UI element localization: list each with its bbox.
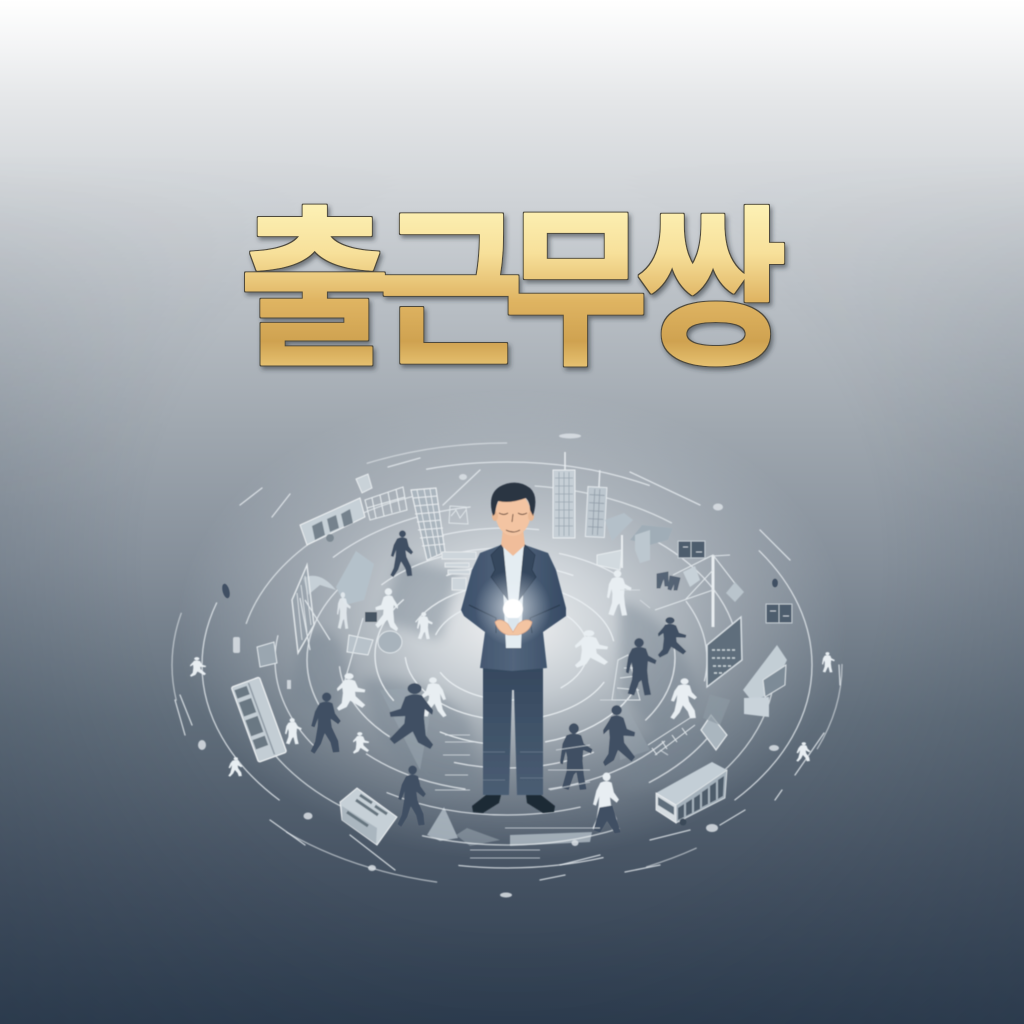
commuter dark: top left [390,530,413,577]
diamond sign [701,715,727,750]
shoes [472,795,555,813]
glass billboard left [292,565,314,653]
top-left bus [300,498,365,545]
orb glow [475,570,551,646]
central glow disc [177,390,847,860]
soft gray patches [290,560,720,800]
leg highlight lines [483,752,543,780]
face [496,492,530,536]
commuter white: runner [337,673,365,711]
bottom rail left of man [300,598,363,680]
tower right [585,470,608,537]
title: 출근무쌍: 출 [239,194,391,387]
commuter white: upper left pair [375,588,398,631]
dog silhouette [285,718,302,744]
house and umbrella left [303,551,374,605]
title: 출근무쌍: 근 [378,195,524,387]
closed eyes and brows [499,513,527,532]
commuter white: arms up [417,612,433,639]
commuter white: upper right [607,570,632,616]
bottom-right bus [656,762,727,826]
commuter white: seated runner [575,630,608,668]
grid building [411,488,445,560]
commuter white: leaning [671,678,697,719]
commuter dark: right dancer [658,617,686,657]
grid fence [365,487,407,520]
low building [442,552,476,590]
commuter dark: right [626,638,656,695]
jacket [461,545,566,671]
commuter white: far right [822,652,835,672]
rounded panel right [703,695,730,725]
cupped hands [495,620,532,635]
swirl of commute scenes [172,390,847,898]
lapels [491,545,536,600]
commuter white: small lower left [228,757,242,777]
glowing orb [503,599,523,619]
commuter white: crouching [353,732,369,754]
dark commuter figures [221,530,777,833]
commuter dark: backpack [603,705,635,766]
railway ladder [612,655,695,755]
commuter white: left [337,592,351,629]
litter and small strokes [435,590,668,858]
commuter white: small left [190,657,206,677]
shirt [501,545,525,648]
signal panels left [347,612,402,655]
small dark figure right [772,579,778,587]
small dark figure top left [221,583,231,599]
white-top figure legs [594,806,620,833]
commuter white: walker [421,677,446,717]
big left bus [231,677,287,762]
scattered specks [198,434,779,898]
commuter dark: left [311,693,341,754]
stacked boxes right [743,645,787,717]
concentric orbit lines [172,443,842,887]
utility pole and wires [655,555,744,627]
hair [491,483,535,516]
central man holding glowing orb [461,483,566,813]
commuter: white top [593,773,619,831]
commuter white: right lower [796,742,810,762]
commuter dark: lower right [560,723,592,790]
neck [501,528,525,556]
pattern tile left [257,642,277,667]
legs [483,668,543,795]
sleeve creases [469,605,560,633]
rooftop sign [356,474,372,493]
dark figure cluster [657,572,680,590]
commuter dark: bottom [398,766,426,827]
commuter dark: striding [390,683,433,749]
dark map panels [678,541,792,623]
white commuter figures [190,570,835,831]
title: 출근무쌍: 무 [503,195,649,387]
orb stem [508,618,519,630]
houses upper right [597,513,673,570]
pale ground shards [380,685,650,846]
bottom-left bus [340,788,397,845]
title: 출근무쌍: 쌍 [636,194,788,387]
ears [492,511,534,521]
tower left [553,452,575,538]
small chart panel [449,506,468,524]
skyline: towers and grid buildings [356,452,608,590]
billboard right [707,617,742,687]
title: 출근무쌍 [239,194,788,387]
background vignette [0,245,1024,720]
